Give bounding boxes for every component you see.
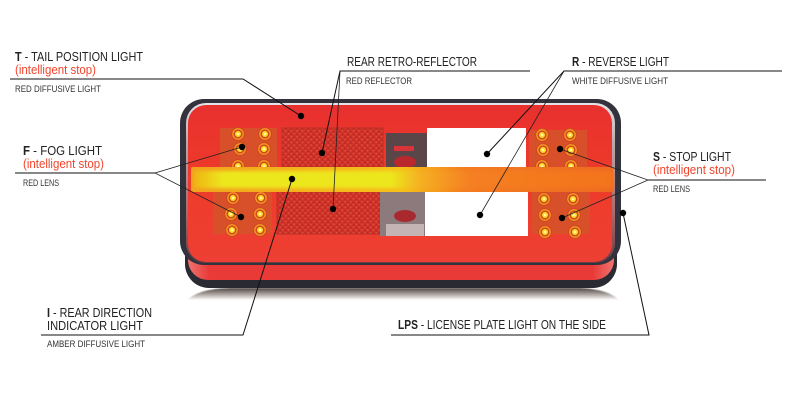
leader: tail light: [10, 79, 304, 119]
white reverse panel: bottom: [425, 192, 528, 236]
label: rear direction indicator light: I - REAR DIRECTION: [47, 306, 152, 320]
label: tail position light: [15, 50, 143, 94]
label: reverse light: R - REVERSE LIGHT: [572, 55, 669, 69]
LED block: bottom right: [532, 192, 590, 239]
leader: retro-reflector: [319, 71, 530, 212]
reflector: top: [282, 128, 383, 167]
label: rear direction indicator light: INDICATOR LIGHT: [47, 319, 143, 333]
label: reverse light: WHITE DIFFUSIVE LIGHT: [572, 76, 668, 86]
leader lines and dots: [10, 71, 782, 335]
label: fog light: RED LENS: [23, 178, 59, 188]
red lens: [188, 105, 612, 262]
centre electronics: top: [386, 133, 427, 168]
leader: stop light: [557, 146, 766, 221]
lens housing: [180, 99, 621, 265]
label: rear direction indicator light: [47, 306, 152, 349]
centre electronics: bottom: [380, 192, 425, 236]
LED block: bottom left: [213, 191, 272, 237]
label: tail position light: T - TAIL POSITION LIGHT: [15, 50, 143, 64]
label: fog light: (intelligent stop): [23, 157, 104, 171]
label: rear direction indicator light: AMBER DIFFUSIVE LIGHT: [47, 339, 145, 349]
label: rear retro-reflector: RED REFLECTOR: [346, 76, 412, 86]
leader: fog light: [15, 144, 245, 220]
leader: reverse light: [477, 71, 782, 218]
label: fog light: F - FOG LIGHT: [23, 144, 102, 158]
label: stop light: RED LENS: [653, 184, 690, 194]
reflection under the lamp: [187, 288, 619, 300]
label: rear retro-reflector: [346, 55, 477, 86]
leader: direction indicator: [41, 176, 295, 335]
lamp photo: [180, 99, 621, 300]
lower red band: [188, 200, 614, 280]
LED block: top right: [529, 128, 587, 173]
white rim: [186, 103, 615, 263]
lower lamp body: [185, 150, 617, 288]
label: reverse light: [572, 55, 669, 86]
label: tail position light: (intelligent stop): [15, 63, 96, 77]
label: stop light: [653, 150, 735, 194]
label: stop light: S - STOP LIGHT: [653, 150, 731, 164]
reflector: bottom: [277, 192, 380, 234]
white reverse panel: top: [427, 128, 526, 167]
label: stop light: (intelligent stop): [653, 163, 735, 177]
label: rear retro-reflector: REAR RETRO-REFLECTOR: [347, 55, 477, 69]
LED block: top left: [220, 127, 277, 173]
amber indicator bar: [191, 167, 613, 192]
label: tail position light: RED DIFFUSIVE LIGHT: [15, 84, 101, 94]
label: licence plate light: LPS - LICENSE PLATE LIGHT ON THE SIDE: [398, 318, 606, 332]
label: fog light: [23, 144, 104, 188]
leader: licence plate light: [391, 210, 649, 335]
